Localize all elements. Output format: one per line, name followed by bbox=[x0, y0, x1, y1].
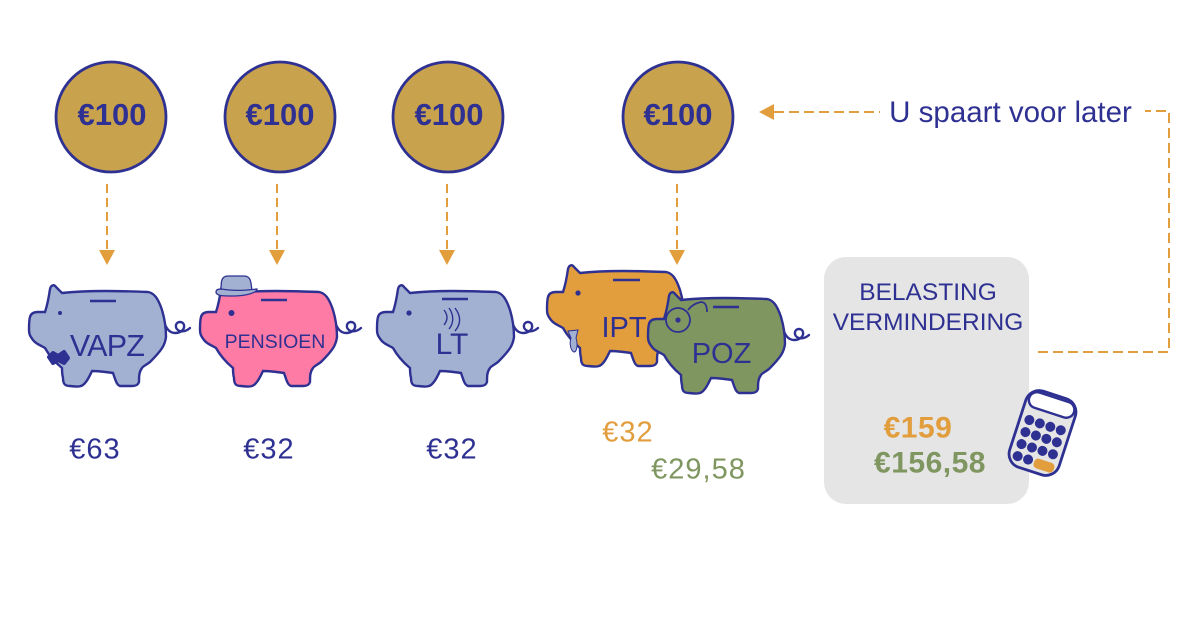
arrow: van belastingvermindering naar spaarlabel bbox=[1038, 111, 1169, 352]
arrow: terug naar de munt bbox=[759, 104, 880, 120]
arrow: coin to LT bbox=[439, 184, 455, 265]
icon: calculator bbox=[1005, 387, 1080, 479]
amount: LT: €32 bbox=[426, 434, 478, 466]
pig: pensioen bbox=[200, 276, 361, 387]
amount: pensioen: €32 bbox=[243, 434, 295, 466]
coin: LT €100: €100 bbox=[415, 97, 483, 132]
pig: POZ: POZ bbox=[692, 338, 751, 370]
coin: IPT/POZ €100: €100 bbox=[644, 97, 712, 132]
pig: IPT: IPT bbox=[601, 312, 647, 344]
amount: POZ: €29,58 bbox=[651, 454, 746, 486]
heading: belastingvermindering: VERMINDERING bbox=[833, 309, 1023, 336]
arrow: coin to pensioen bbox=[269, 184, 285, 265]
pig: IPT bbox=[547, 265, 684, 367]
label: U spaart voor later: U spaart voor later bbox=[889, 96, 1132, 129]
coin: VAPZ €100: €100 bbox=[78, 97, 146, 132]
pig: LT: LT bbox=[436, 328, 468, 361]
icon: monocle bbox=[666, 302, 707, 332]
icon: tie bbox=[568, 330, 578, 352]
coin: pensioen €100 bbox=[225, 62, 335, 172]
icon: hat bbox=[216, 276, 257, 296]
coin: IPT/POZ €100 bbox=[623, 62, 733, 172]
arrow: coin to IPT/POZ bbox=[669, 184, 685, 265]
pig: LT bbox=[377, 285, 538, 387]
amount: VAPZ: €63 bbox=[69, 434, 121, 466]
amount: IPT: €32 bbox=[602, 416, 654, 448]
heading: belastingvermindering: BELASTING bbox=[859, 279, 997, 306]
icon: sound waves bbox=[444, 308, 460, 331]
pig: POZ bbox=[648, 292, 809, 394]
icon: bow tie bbox=[49, 352, 68, 363]
pig: pensioen: PENSIOEN bbox=[225, 331, 325, 353]
pig: VAPZ bbox=[29, 285, 190, 387]
coin: VAPZ €100 bbox=[56, 62, 166, 172]
panel: belastingvermindering bbox=[824, 257, 1029, 504]
arrow: coin to VAPZ bbox=[99, 184, 115, 265]
coin: pensioen €100: €100 bbox=[246, 97, 314, 132]
amount: POZ total: €156,58 bbox=[874, 446, 986, 480]
pig: VAPZ: VAPZ bbox=[70, 329, 144, 363]
coin: LT €100 bbox=[393, 62, 503, 172]
amount: IPT total: €159 bbox=[884, 412, 952, 444]
